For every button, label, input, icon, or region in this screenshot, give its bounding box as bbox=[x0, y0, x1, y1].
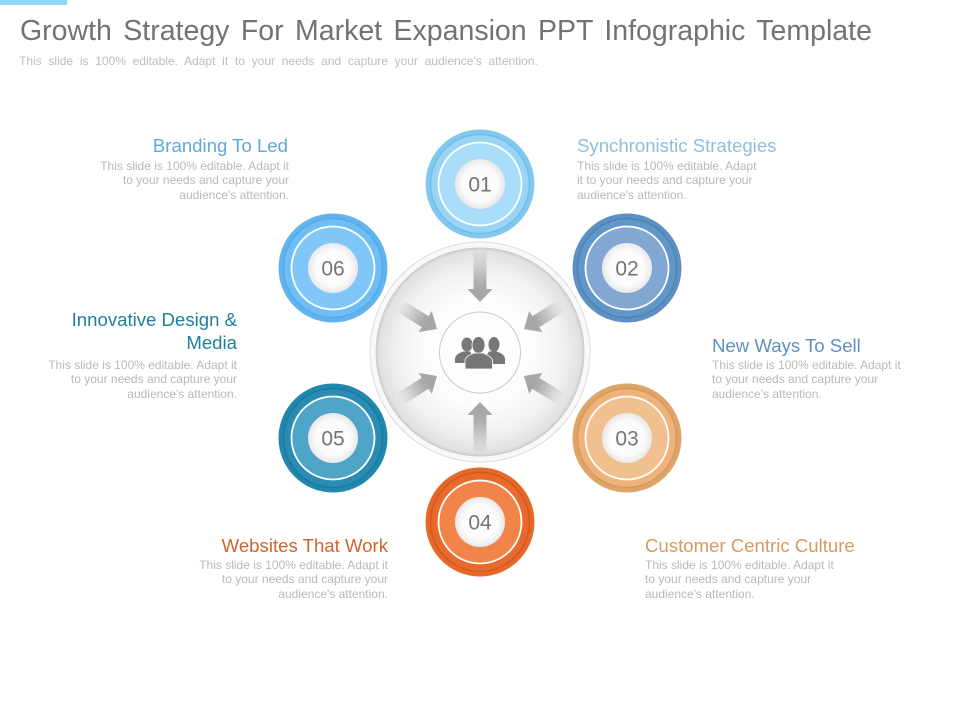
text block: New Ways To Sell: New Ways To Sell bbox=[712, 335, 861, 356]
text block: Customer Centric Culture: Customer Centric Culture bbox=[645, 535, 855, 556]
top accent bar bbox=[0, 0, 67, 5]
central hub bbox=[370, 242, 590, 462]
text block: Customer Centric Culture: audience's attention. bbox=[645, 587, 755, 601]
arrows pointing to centre bbox=[393, 252, 568, 452]
text block: Synchronistic Strategies bbox=[577, 135, 776, 202]
text block: Branding To Led bbox=[100, 135, 290, 202]
node 06 bbox=[278, 214, 388, 322]
node 04 bbox=[426, 468, 534, 576]
node 01 bbox=[426, 130, 534, 238]
node 04: 04 bbox=[468, 512, 492, 534]
text block: Websites That Work: to your needs and capture your bbox=[222, 572, 388, 586]
text block: Customer Centric Culture: to your needs and capture your bbox=[645, 572, 811, 586]
node 02: 02 bbox=[615, 258, 639, 280]
text block: Innovative Design & Media: Media bbox=[186, 332, 238, 353]
text block: Synchronistic Strategies: This slide is 100% editable. Adapt bbox=[577, 159, 757, 173]
text block: Branding To Led: to your needs and capture your bbox=[123, 173, 289, 187]
node 06: 06 bbox=[321, 258, 345, 280]
title: Growth Strategy For Market Expansion PPT Infographic Template bbox=[20, 15, 872, 47]
text block: Websites That Work: This slide is 100% editable. Adapt it bbox=[199, 558, 389, 572]
icon: people group bbox=[455, 336, 505, 369]
subtitle: This slide is 100% editable. Adapt it to your needs and capture your audience's attention. bbox=[19, 54, 538, 68]
text block: Branding To Led: Branding To Led bbox=[153, 135, 288, 156]
node 01: 01 bbox=[468, 174, 492, 196]
text block: Synchronistic Strategies: audience's attention. bbox=[577, 188, 687, 202]
text block: Customer Centric Culture: This slide is 100% editable. Adapt it bbox=[645, 558, 834, 572]
text block: Innovative Design & Media bbox=[48, 309, 238, 401]
text block: Customer Centric Culture bbox=[645, 535, 855, 601]
text block: New Ways To Sell: to your needs and capture your bbox=[712, 372, 878, 386]
text block: New Ways To Sell: audience's attention. bbox=[712, 387, 822, 401]
text block: Synchronistic Strategies: Synchronistic Strategies bbox=[577, 135, 776, 156]
text block: Innovative Design & Media: audience's attention. bbox=[127, 387, 237, 401]
node 03: 03 bbox=[615, 428, 639, 450]
text block: Websites That Work bbox=[199, 535, 389, 601]
text block: Synchronistic Strategies: it to your needs and capture your bbox=[577, 173, 752, 187]
text block: New Ways To Sell bbox=[712, 335, 901, 401]
inner circle bbox=[440, 312, 520, 393]
text block: Branding To Led: This slide is 100% editable. Adapt it bbox=[100, 159, 290, 173]
text block: Branding To Led: audience's attention. bbox=[179, 188, 289, 202]
node 03 bbox=[572, 384, 682, 492]
text block: Innovative Design & Media: Innovative Design & bbox=[72, 309, 238, 330]
text block: Innovative Design & Media: to your needs and capture your bbox=[71, 372, 237, 386]
node 02 bbox=[572, 214, 682, 322]
text block: Innovative Design & Media: This slide is 100% editable. Adapt it bbox=[48, 358, 238, 372]
node 05: 05 bbox=[321, 428, 345, 450]
text block: New Ways To Sell: This slide is 100% editable. Adapt it bbox=[712, 358, 901, 372]
text block: Websites That Work: Websites That Work bbox=[222, 535, 389, 556]
text block: Websites That Work: audience's attention. bbox=[278, 587, 388, 601]
node 05 bbox=[278, 384, 388, 492]
